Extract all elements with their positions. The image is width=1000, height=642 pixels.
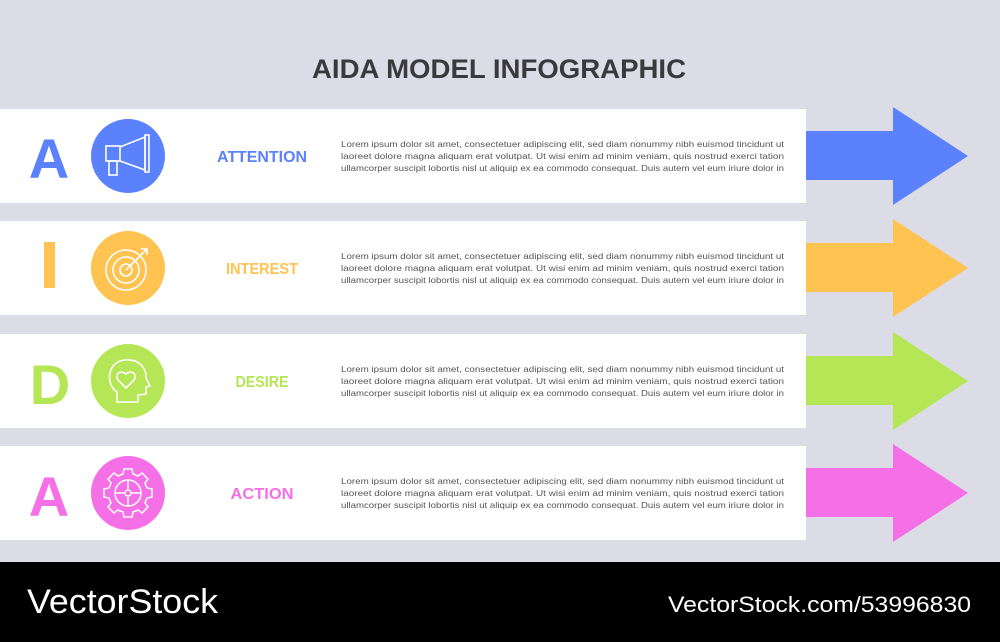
arrow [806,444,968,542]
text block: laoreet dolore magna aliquam erat volutpat. Ut wisi enim ad minim veniam, quis nostrud exerci tation [341,376,784,386]
row: action [0,444,968,542]
letter D: D [30,353,70,416]
icon: head with heart [91,344,165,418]
row: attention [0,107,968,205]
letter I [44,242,55,288]
label: ACTION [230,486,294,503]
text block: ullamcorper suscipit lobortis nisl ut aliquip ex ea commodo consequat. Duis autem vel eum iriure dolor in [341,388,784,398]
text block: laoreet dolore magna aliquam erat volutpat. Ut wisi enim ad minim veniam, quis nostrud exerci tation [341,488,784,498]
letter A: A [29,465,69,528]
icon: megaphone [91,119,165,193]
label: INTEREST [226,261,298,278]
title: AIDA MODEL INFOGRAPHIC [312,54,686,84]
text block: Lorem ipsum dolor sit amet, consectetuer adipiscing elit, sed diam nonummy nibh euismod tincidunt ut [341,251,785,261]
letter A: A [29,127,69,190]
text block: Lorem ipsum dolor sit amet, consectetuer adipiscing elit, sed diam nonummy nibh euismod tincidunt ut [341,476,785,486]
label: ATTENTION [217,149,307,166]
text block: laoreet dolore magna aliquam erat volutpat. Ut wisi enim ad minim veniam, quis nostrud exerci tation [341,263,784,273]
text block: ullamcorper suscipit lobortis nisl ut aliquip ex ea commodo consequat. Duis autem vel eum iriure dolor in [341,163,784,173]
footer bar [0,562,1000,642]
icon: target [91,231,165,305]
text block: laoreet dolore magna aliquam erat volutpat. Ut wisi enim ad minim veniam, quis nostrud exerci tation [341,151,784,161]
text block: ullamcorper suscipit lobortis nisl ut aliquip ex ea commodo consequat. Duis autem vel eum iriure dolor in [341,275,784,285]
footer logo: VectorStock [27,583,219,621]
icon: gear [91,456,165,530]
row: interest [0,219,968,317]
arrow [806,332,968,430]
arrow [806,219,968,317]
text block: Lorem ipsum dolor sit amet, consectetuer adipiscing elit, sed diam nonummy nibh euismod tincidunt ut [341,364,785,374]
label: DESIRE [236,374,289,391]
footer url: VectorStock.com/53996830 [668,592,971,617]
row: desire [0,332,968,430]
arrow [806,107,968,205]
text block: Lorem ipsum dolor sit amet, consectetuer adipiscing elit, sed diam nonummy nibh euismod tincidunt ut [341,139,785,149]
text block: ullamcorper suscipit lobortis nisl ut aliquip ex ea commodo consequat. Duis autem vel eum iriure dolor in [341,500,784,510]
